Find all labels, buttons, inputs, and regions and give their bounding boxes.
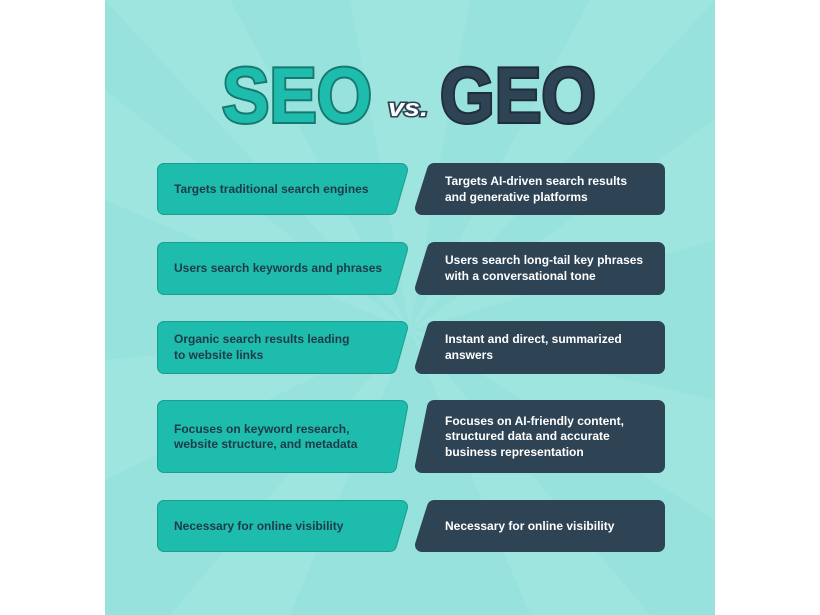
row 2: Users search keywords and phrases — [174, 261, 382, 275]
row 5: Necessary for online visibility — [445, 519, 615, 533]
background panel — [105, 0, 715, 615]
row 4: website structure, and metadata — [173, 437, 358, 451]
title — [222, 51, 596, 139]
row 1: and generative platforms — [445, 190, 588, 204]
row 4: Focuses on keyword research, — [174, 422, 349, 436]
row 5: Necessary for online visibility — [174, 519, 344, 533]
row 4: business representation — [445, 445, 584, 459]
row 3: answers — [445, 348, 493, 362]
row 3: to website links — [174, 348, 264, 362]
title: SEO — [222, 51, 372, 139]
row 4 — [164, 407, 658, 466]
row 3: Instant and direct, summarized — [445, 332, 622, 346]
row 3 — [164, 328, 658, 367]
row 1: Targets traditional search engines — [174, 182, 369, 196]
row 1 — [164, 170, 658, 208]
row 1: Targets AI-driven search results — [445, 174, 627, 188]
title: GEO — [440, 51, 596, 139]
row 4: Focuses on AI-friendly content, — [445, 414, 624, 428]
row 2: Users search long-tail key phrases — [445, 253, 643, 267]
row 3: Organic search results leading — [174, 332, 349, 346]
row 2: with a conversational tone — [444, 269, 596, 283]
title: vs. — [388, 95, 428, 122]
row 5 — [164, 507, 658, 545]
row 2 — [164, 249, 658, 288]
row 4: structured data and accurate — [445, 429, 610, 443]
